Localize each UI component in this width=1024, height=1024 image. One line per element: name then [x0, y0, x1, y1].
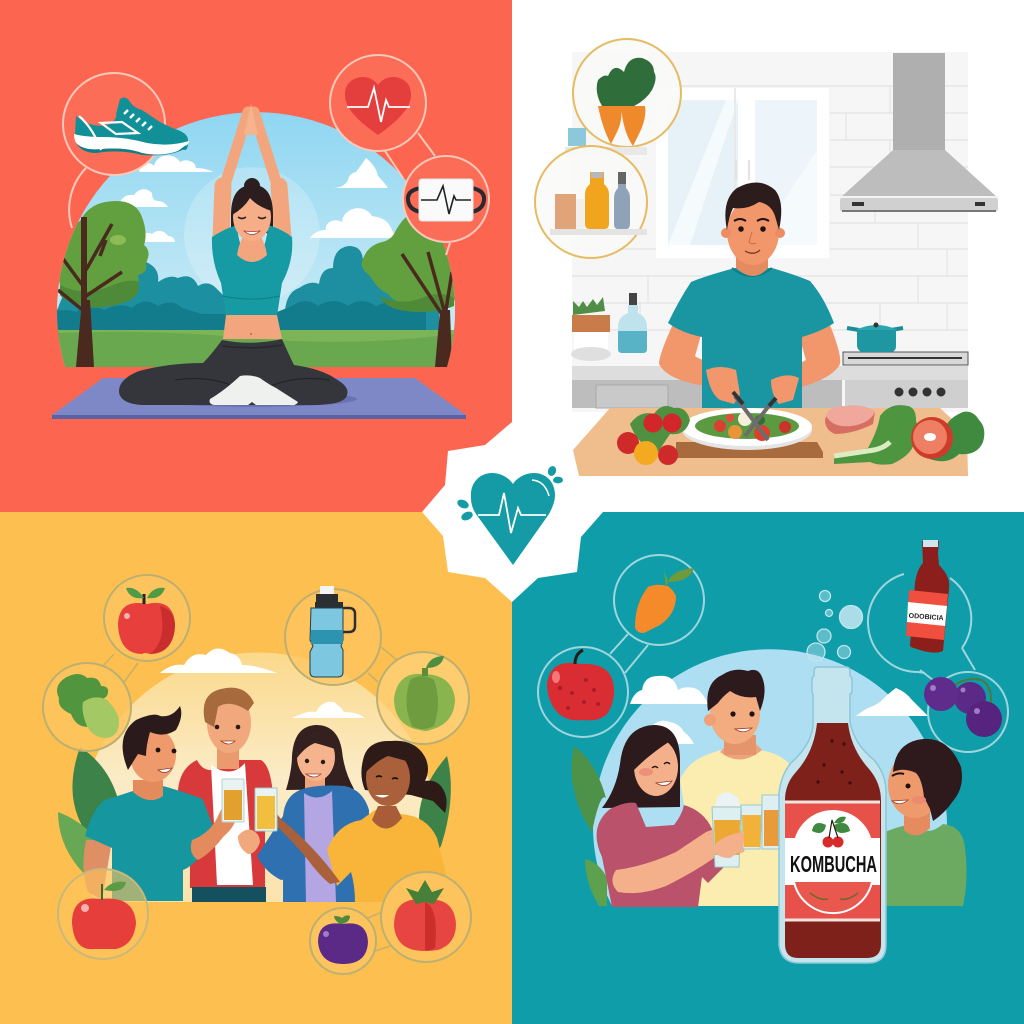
plum icon circle — [310, 908, 376, 974]
woman 2 yellow shirt — [264, 741, 452, 902]
leafy carrots icon circle — [573, 39, 681, 147]
neck — [736, 250, 768, 276]
leafy greens — [834, 405, 984, 465]
white socks — [210, 375, 298, 405]
carrot icon circle — [614, 555, 704, 645]
mini label text: ODOBICIA — [908, 613, 944, 622]
hair back — [231, 185, 273, 243]
plant leaves — [571, 746, 698, 906]
belly — [223, 315, 282, 339]
right tree — [362, 208, 458, 367]
man 1 teal shirt — [83, 706, 238, 901]
arms raised — [224, 112, 248, 188]
man 2 red jacket — [178, 688, 273, 902]
grapefruit slice — [911, 417, 953, 459]
heart rate icon circle — [330, 55, 426, 151]
bubbles — [807, 590, 862, 661]
panel: yoga and exercise — [0, 0, 512, 512]
cutting board and salad plate — [676, 392, 823, 458]
connector lines — [385, 133, 450, 255]
yoga mat — [52, 378, 466, 419]
steak — [825, 406, 875, 434]
kitchen wall — [572, 52, 968, 412]
hand between friends — [238, 830, 260, 854]
panel: kombucha — [512, 512, 1024, 1024]
range hood — [840, 53, 998, 212]
tomatoes and greens left — [617, 406, 690, 465]
connector lines — [103, 647, 397, 951]
heart — [345, 77, 411, 135]
window — [656, 88, 829, 258]
juice glasses — [222, 779, 277, 831]
center man — [680, 670, 790, 906]
three friends — [597, 670, 967, 907]
big kombucha bottle — [779, 667, 886, 963]
neck — [243, 235, 261, 257]
panel: healthy cooking kitchen — [512, 0, 1024, 512]
water bottle on counter — [618, 293, 647, 353]
face — [233, 193, 271, 241]
woman blue cardigan — [257, 725, 369, 902]
label text: KOMBUCHA — [790, 851, 877, 877]
woman in yoga pose — [119, 104, 348, 405]
left tree — [58, 201, 149, 367]
potted plant — [571, 297, 611, 361]
cherry logo — [812, 817, 850, 848]
plant leaves — [58, 747, 451, 889]
sunlit dome with clouds — [80, 648, 436, 902]
green pepper icon circle — [377, 652, 469, 744]
lettuce icon circle — [43, 663, 131, 751]
bottles on shelf icon circle — [535, 128, 647, 258]
group of four friends — [83, 688, 452, 902]
woman in pink — [597, 725, 746, 907]
sky dome with clouds — [593, 649, 947, 906]
shirt — [668, 268, 834, 408]
right man green shirt — [885, 739, 967, 906]
blue sleeve — [257, 816, 293, 880]
sneaker — [74, 98, 189, 155]
fitness monitor icon circle — [403, 156, 489, 242]
water bottle icon circle — [285, 586, 381, 685]
halo glow — [184, 167, 320, 303]
head — [727, 199, 779, 265]
legs crossed — [119, 339, 348, 405]
red apple bottom-left icon circle — [58, 869, 148, 959]
table — [573, 408, 968, 476]
torso shirt — [212, 225, 292, 316]
tomato icon circle — [381, 872, 471, 962]
spotted apple icon circle — [538, 647, 628, 737]
connector lines — [610, 634, 975, 690]
hills — [57, 262, 226, 340]
icon: teal heart with pulse — [456, 465, 563, 565]
yoga park scene — [40, 110, 470, 370]
apple icon circle — [104, 575, 190, 661]
panel: friends toasting — [0, 512, 512, 1024]
grapes/cherries icon circle — [924, 672, 1008, 752]
hands — [706, 367, 740, 404]
arms — [659, 320, 719, 386]
small kombucha bottle icon circle — [868, 540, 971, 673]
sneaker icon circle — [63, 73, 189, 228]
man cooking — [659, 182, 840, 408]
counter and cabinets — [572, 366, 968, 408]
juice glasses — [712, 792, 782, 867]
stove and pot — [843, 322, 968, 365]
center badge background — [422, 422, 604, 602]
